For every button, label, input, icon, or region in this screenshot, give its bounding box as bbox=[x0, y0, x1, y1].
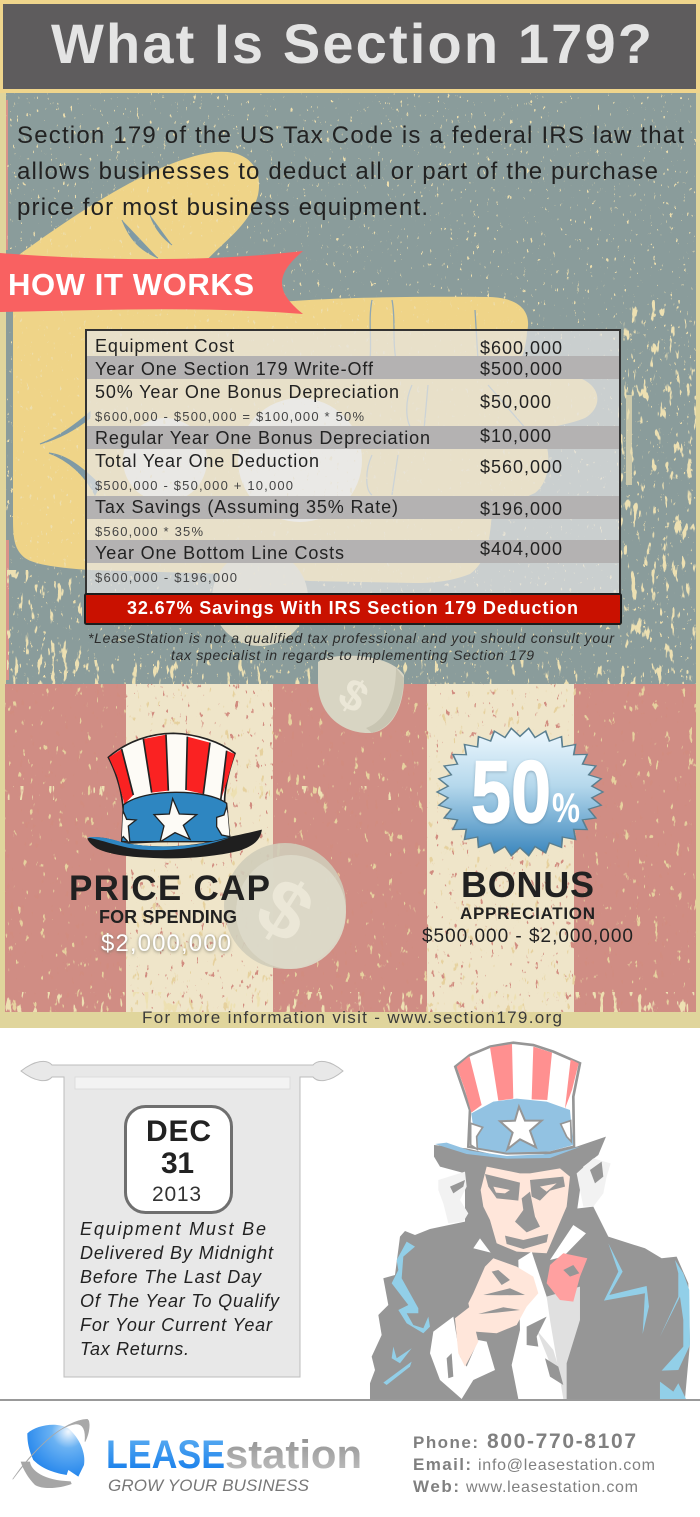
hat brim and head shadow bbox=[434, 1137, 606, 1260]
coat bbox=[370, 1207, 690, 1399]
deadline text: Tax Returns. bbox=[80, 1339, 189, 1359]
face bbox=[481, 1167, 570, 1253]
logo orb bbox=[13, 1419, 89, 1488]
text: bonus: BONUS bbox=[461, 864, 594, 905]
text: price cap: $2,000,000 bbox=[101, 930, 231, 957]
contact details: Web: bbox=[413, 1477, 459, 1496]
table row labels: Tax Savings (Assuming 35% Rate) bbox=[95, 497, 398, 517]
intro text: Section 179 of the US Tax Code is a federal IRS law that bbox=[17, 122, 684, 149]
divider above footer bbox=[0, 1399, 700, 1401]
table values: $196,000 bbox=[480, 499, 562, 519]
text: bonus: $500,000 - $2,000,000 bbox=[422, 926, 633, 947]
table row labels: Regular Year One Bonus Depreciation bbox=[95, 428, 430, 448]
table row labels: Total Year One Deduction bbox=[95, 451, 319, 471]
icon: 50% badge bbox=[437, 728, 603, 856]
coin: large: $ bbox=[241, 860, 328, 961]
bow tie bbox=[547, 1253, 587, 1302]
panel: hanging banner bbox=[21, 1061, 343, 1377]
logo: lease station: LEASE bbox=[106, 1433, 225, 1477]
cuff and wrist bbox=[430, 1317, 495, 1399]
table row labels: Equipment Cost bbox=[95, 336, 234, 356]
stars on hat bbox=[122, 796, 230, 842]
contact details bbox=[413, 1430, 655, 1496]
deadline text: Before The Last Day bbox=[80, 1267, 262, 1287]
title band bbox=[0, 0, 700, 93]
table row formulas bbox=[95, 409, 364, 585]
deadline text: Delivered By Midnight bbox=[80, 1243, 274, 1263]
contact details: Phone: bbox=[413, 1433, 478, 1452]
table values: $404,000 bbox=[480, 539, 562, 559]
table values: $600,000 bbox=[480, 338, 562, 358]
contact details: info@leasestation.com bbox=[478, 1457, 655, 1474]
savings bar bbox=[85, 594, 621, 624]
icon: 50% badge: 50 bbox=[471, 743, 551, 842]
contact details: Email: bbox=[413, 1455, 471, 1474]
table values: $10,000 bbox=[480, 426, 551, 446]
date box: 2013 bbox=[152, 1183, 201, 1206]
deadline text: For Your Current Year bbox=[80, 1315, 273, 1335]
savings bar: 32.67% Savings With IRS Section 179 Deduction bbox=[127, 598, 578, 618]
table row labels: 50% Year One Bonus Depreciation bbox=[95, 382, 399, 402]
text: price cap: PRICE CAP bbox=[69, 869, 270, 908]
contact details: 800-770-8107 bbox=[487, 1430, 636, 1453]
collar bbox=[473, 1238, 491, 1253]
coin: top bbox=[318, 656, 404, 733]
pointing hand bbox=[468, 1258, 538, 1333]
text: price cap: FOR SPENDING bbox=[99, 907, 237, 927]
ribbon: how it works bbox=[0, 251, 303, 314]
text: bonus: APPRECIATION bbox=[460, 904, 595, 923]
more information line: For more information visit - www.section179.org bbox=[142, 1008, 562, 1027]
title: What Is Section 179? bbox=[51, 12, 652, 75]
table row labels bbox=[95, 336, 430, 563]
disclaimer: tax specialist in regards to implementing Section 179 bbox=[171, 647, 534, 663]
table row labels: Year One Bottom Line Costs bbox=[95, 543, 344, 563]
coin: large bbox=[224, 843, 346, 969]
logo: lease station: GROW YOUR BUSINESS bbox=[108, 1476, 310, 1495]
table row formulas: $600,000 - $196,000 bbox=[95, 570, 237, 585]
intro text bbox=[17, 122, 684, 221]
deadline text bbox=[80, 1219, 280, 1359]
shirt and vest bbox=[543, 1287, 580, 1399]
logo: lease station: station bbox=[225, 1433, 362, 1477]
deadline text: Equipment Must Be bbox=[80, 1219, 266, 1239]
text: price cap bbox=[69, 869, 270, 958]
table values bbox=[480, 338, 562, 559]
icon: striped top hat bbox=[87, 733, 262, 858]
panel: cost table bbox=[86, 330, 620, 595]
coat blue highlights bbox=[383, 1242, 690, 1399]
table row formulas: $600,000 - $500,000 = $100,000 * 50% bbox=[95, 409, 364, 424]
table values: $500,000 bbox=[480, 359, 562, 379]
table row formulas: $560,000 * 35% bbox=[95, 524, 203, 539]
table row labels: Year One Section 179 Write-Off bbox=[95, 359, 374, 379]
disclaimer: *LeaseStation is not a qualified tax professional and you should consult your bbox=[88, 630, 615, 646]
date box bbox=[126, 1106, 232, 1212]
intro text: allows businesses to deduct all or part of the purchase bbox=[17, 158, 658, 185]
hat crown bbox=[455, 1043, 580, 1153]
intro text: price for most business equipment. bbox=[17, 194, 428, 221]
icon: 50% badge: 50 bbox=[471, 742, 551, 841]
text: bonus bbox=[422, 864, 633, 947]
ribbon: how it works: HOW IT WORKS bbox=[8, 267, 254, 302]
date box: DEC bbox=[146, 1115, 211, 1148]
panel: red and cream stripes background bbox=[5, 684, 696, 1012]
illustration: uncle sam bbox=[370, 1043, 690, 1399]
text: price cap: $2,000,000 bbox=[101, 931, 231, 958]
table row formulas: $500,000 - $50,000 + 10,000 bbox=[95, 478, 293, 493]
deadline text: Of The Year To Qualify bbox=[80, 1291, 280, 1311]
panel: blue distressed background with hand bbox=[6, 93, 696, 684]
logo: lease station bbox=[13, 1419, 362, 1495]
date box: 31 bbox=[161, 1147, 194, 1180]
disclaimer bbox=[88, 630, 615, 663]
coin: top: $ bbox=[330, 669, 377, 723]
table values: $560,000 bbox=[480, 457, 562, 477]
table values: $50,000 bbox=[480, 392, 551, 412]
icon: 50% badge: % bbox=[552, 784, 580, 831]
contact details: www.leasestation.com bbox=[465, 1479, 638, 1496]
hair bbox=[438, 1172, 468, 1223]
